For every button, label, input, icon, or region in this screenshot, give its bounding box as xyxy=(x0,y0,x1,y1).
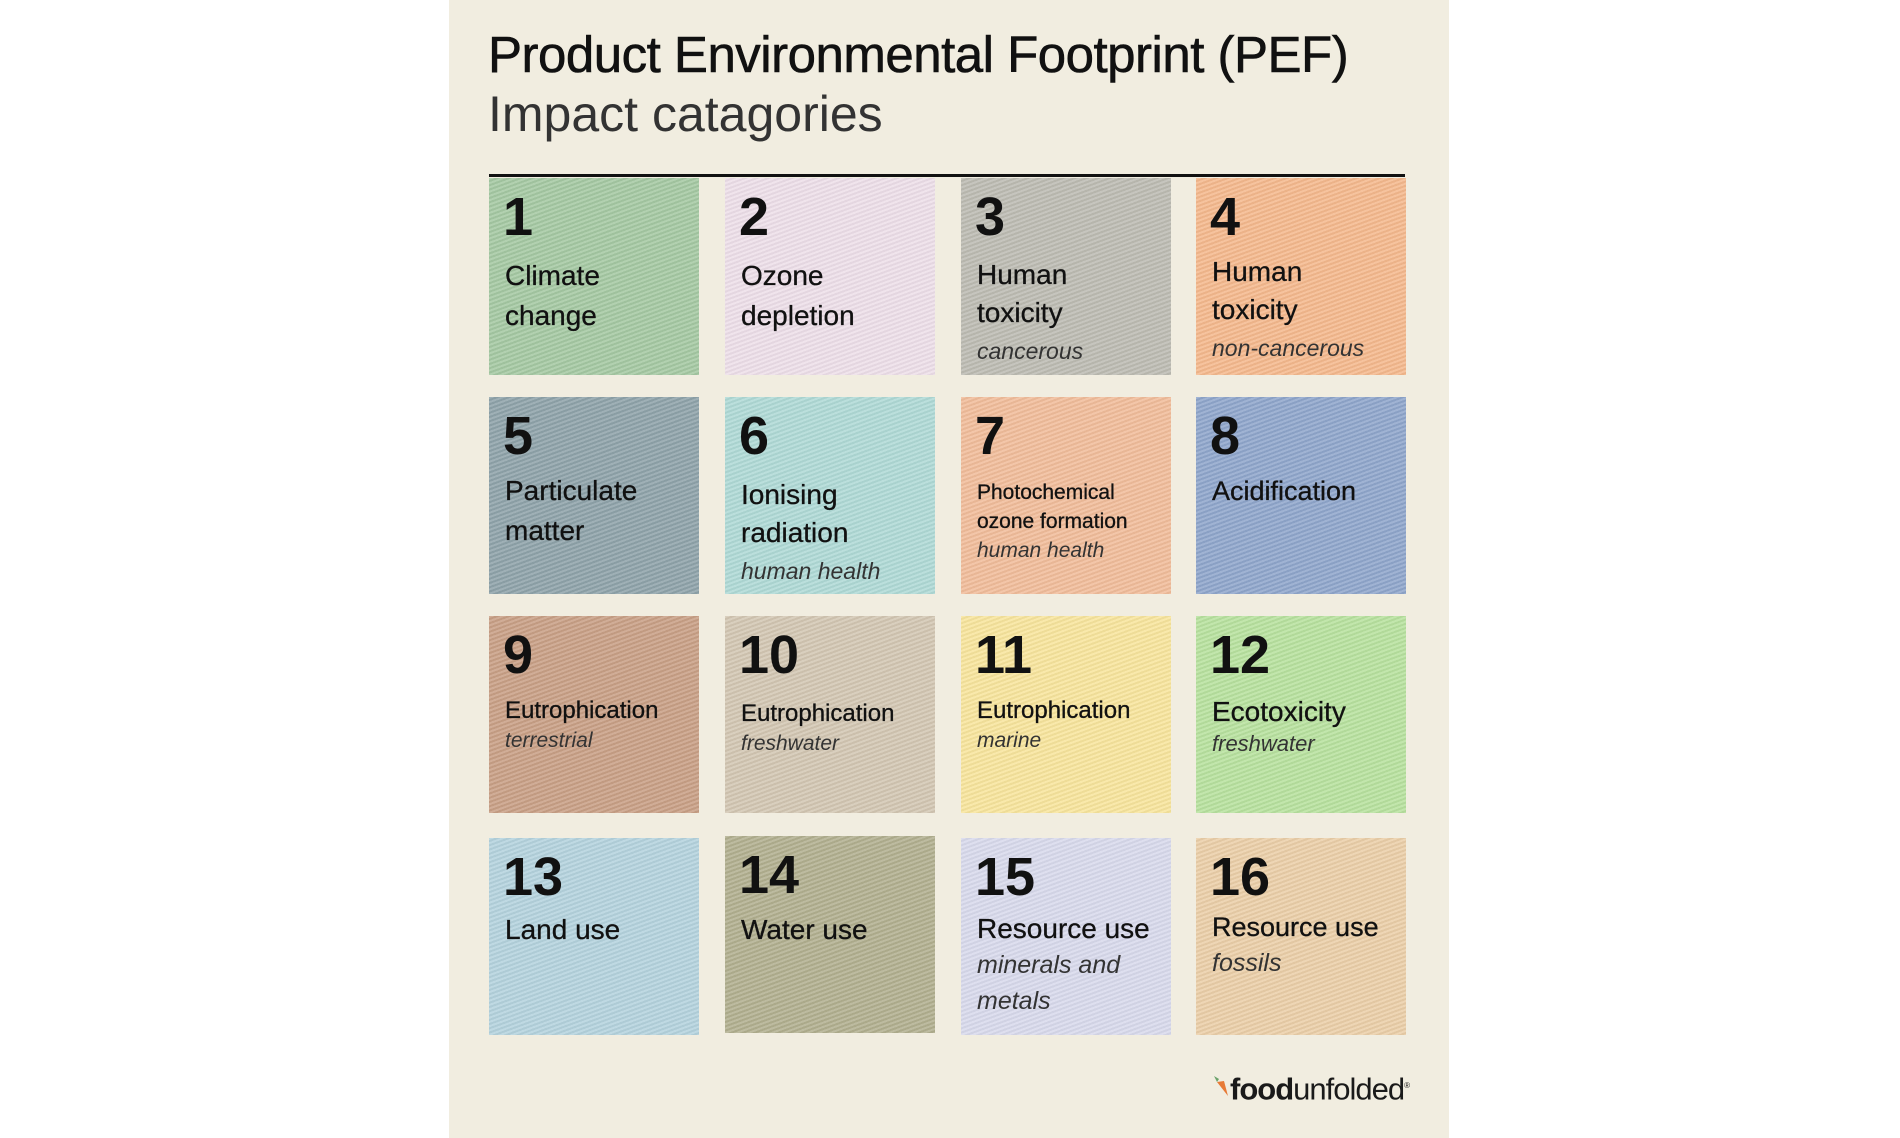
tile 5: particulate matter: matter xyxy=(505,515,584,546)
tile 15: resource use minerals and metals: Resource use xyxy=(977,913,1150,944)
tile 16: resource use fossils: fossils xyxy=(1212,949,1281,977)
tile 12: ecotoxicity freshwater: 12 xyxy=(1210,625,1270,685)
tile 7: photochemical ozone formation: 7 xyxy=(975,406,1005,466)
tile 8: acidification: Acidification xyxy=(1212,476,1356,506)
icon: carrot xyxy=(1214,1076,1228,1096)
tile 1: climate change: Climate xyxy=(505,260,600,291)
tile 1: climate change: 1 xyxy=(503,187,533,247)
tile 11: eutrophication marine: Eutrophication xyxy=(977,697,1130,724)
tile 2: ozone depletion: 2 xyxy=(739,187,769,247)
title: Product Environmental Footprint (PEF) xyxy=(488,26,1348,83)
tile 6: ionising radiation: Ionising xyxy=(741,479,838,510)
tile 4: human toxicity non-cancerous: 4 xyxy=(1210,187,1240,247)
tile 3: human toxicity cancerous: 3 xyxy=(975,187,1005,247)
tile 10: eutrophication freshwater: Eutrophication xyxy=(741,700,894,727)
tile 2: ozone depletion: depletion xyxy=(741,300,855,331)
tile 4: human toxicity non-cancerous xyxy=(1196,178,1406,375)
tile 15: resource use minerals and metals: metals xyxy=(977,987,1051,1015)
tile 7: photochemical ozone formation: ozone formation xyxy=(977,510,1128,533)
tile 10: eutrophication freshwater xyxy=(725,616,935,813)
tile 15: resource use minerals and metals: minerals and xyxy=(977,951,1120,979)
tile 11: eutrophication marine xyxy=(961,616,1171,813)
tile 9: eutrophication terrestrial xyxy=(489,616,699,813)
tile 12: ecotoxicity freshwater: freshwater xyxy=(1212,731,1315,756)
tile 7: photochemical ozone formation: Photochemical xyxy=(977,481,1115,504)
tile 3: human toxicity cancerous: Human xyxy=(977,259,1067,290)
tile 12: ecotoxicity freshwater xyxy=(1196,616,1406,813)
tile 6: ionising radiation: radiation xyxy=(741,517,848,548)
panel: background card xyxy=(449,0,1449,1138)
tile 4: human toxicity non-cancerous: toxicity xyxy=(1212,294,1298,325)
tile 7: photochemical ozone formation xyxy=(961,397,1171,594)
tile 12: ecotoxicity freshwater: Ecotoxicity xyxy=(1212,696,1346,727)
tile 2: ozone depletion: Ozone xyxy=(741,260,824,291)
logo: foodunfolded: foodunfolded® xyxy=(1230,1071,1409,1106)
tile 10: eutrophication freshwater: freshwater xyxy=(741,732,839,755)
tile 9: eutrophication terrestrial: 9 xyxy=(503,625,533,685)
tile 6: ionising radiation: human health xyxy=(741,558,880,584)
tile 2: ozone depletion xyxy=(725,178,935,375)
tile 14: water use: 14 xyxy=(739,845,799,905)
tile 5: particulate matter xyxy=(489,397,699,594)
tile 8: acidification: 8 xyxy=(1210,406,1240,466)
tile 6: ionising radiation: 6 xyxy=(739,406,769,466)
tile 4: human toxicity non-cancerous: Human xyxy=(1212,256,1302,287)
tile 14: water use xyxy=(725,836,935,1033)
tile 11: eutrophication marine: 11 xyxy=(975,625,1032,685)
tile 16: resource use fossils xyxy=(1196,838,1406,1035)
tile 6: ionising radiation xyxy=(725,397,935,594)
tile 3: human toxicity cancerous: toxicity xyxy=(977,297,1063,328)
tile 3: human toxicity cancerous: cancerous xyxy=(977,338,1083,364)
tile 14: water use: Water use xyxy=(741,914,868,945)
tile 1: climate change xyxy=(489,178,699,375)
tile 9: eutrophication terrestrial: Eutrophication xyxy=(505,697,658,724)
tile 3: human toxicity cancerous xyxy=(961,178,1171,375)
tile 8: acidification xyxy=(1196,397,1406,594)
tile 16: resource use fossils: 16 xyxy=(1210,847,1270,907)
tile 4: human toxicity non-cancerous: non-cancerous xyxy=(1212,335,1364,361)
tile 13: land use: 13 xyxy=(503,847,563,907)
tile 10: eutrophication freshwater: 10 xyxy=(739,625,799,685)
tile 13: land use: Land use xyxy=(505,914,620,945)
tile 1: climate change: change xyxy=(505,300,597,331)
tile 5: particulate matter: 5 xyxy=(503,406,533,466)
tile 16: resource use fossils: Resource use xyxy=(1212,912,1379,942)
tile 15: resource use minerals and metals xyxy=(961,838,1171,1035)
tile 15: resource use minerals and metals: 15 xyxy=(975,847,1035,907)
tile 11: eutrophication marine: marine xyxy=(977,729,1041,752)
tile 7: photochemical ozone formation: human health xyxy=(977,539,1104,562)
subtitle: Impact catagories xyxy=(488,86,883,142)
tile 5: particulate matter: Particulate xyxy=(505,475,637,506)
tile 9: eutrophication terrestrial: terrestrial xyxy=(505,729,593,752)
tile 13: land use xyxy=(489,838,699,1035)
